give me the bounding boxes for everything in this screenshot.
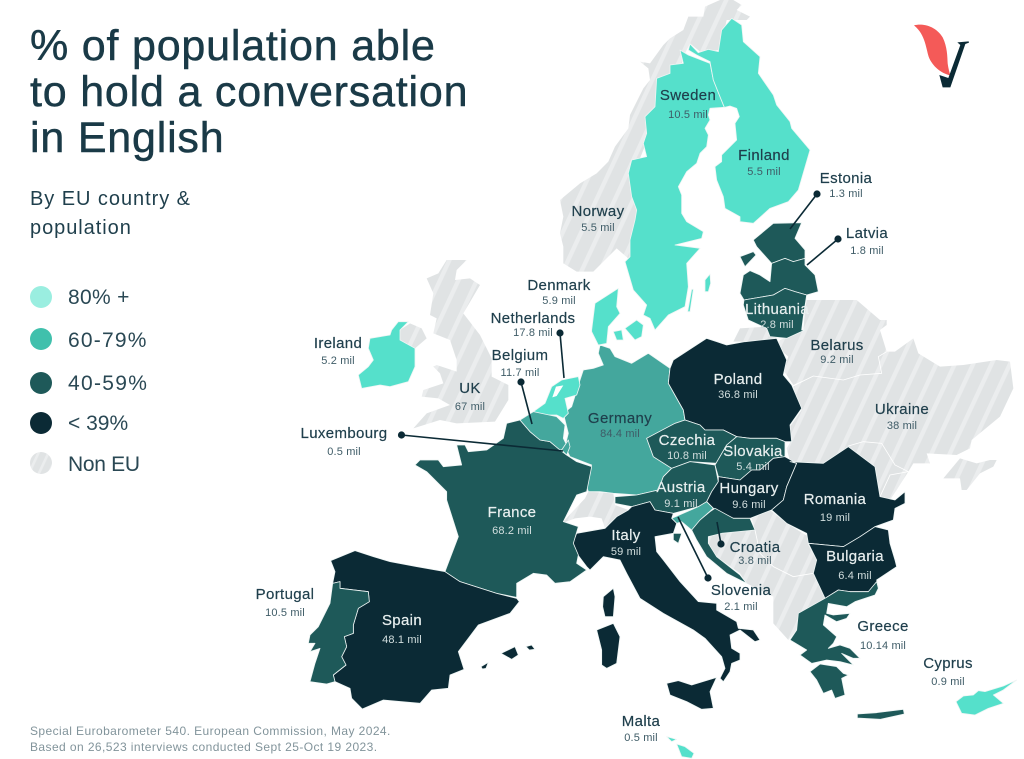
map of Europe bbox=[308, 0, 1017, 758]
country: Croatia bbox=[682, 508, 755, 583]
label: Hungary bbox=[719, 480, 779, 511]
legend item: 60-79%: 60-79% bbox=[68, 329, 148, 352]
label: Belgium: 11.7 mil bbox=[501, 367, 539, 379]
country: Austria bbox=[615, 462, 718, 513]
source note: Special Eurobarometer 540. European Commission, May 2024. bbox=[30, 724, 391, 738]
Greece: Peloponnese bbox=[810, 664, 848, 698]
country: Spain bbox=[331, 551, 519, 709]
label: Portugal: Portugal bbox=[256, 586, 314, 603]
label: Cyprus: 0.9 mil bbox=[931, 676, 965, 688]
label: Greece: 10.14 mil bbox=[860, 640, 906, 652]
country: Luxembourg bbox=[562, 440, 570, 455]
island: Sardinia bbox=[597, 623, 620, 668]
label: Sweden bbox=[660, 87, 716, 121]
country: Denmark (Jutland) bbox=[592, 288, 620, 345]
country: Cyprus bbox=[956, 680, 1017, 715]
label: Germany: 84.4 mil bbox=[600, 428, 640, 440]
label: Sweden: 10.5 mil bbox=[668, 109, 708, 121]
label: Latvia: Latvia bbox=[846, 225, 888, 242]
country: Belgium bbox=[520, 412, 568, 450]
label: Italy: 59 mil bbox=[611, 546, 641, 558]
country: France bbox=[415, 420, 592, 597]
label: Bulgaria: Bulgaria bbox=[826, 548, 884, 565]
Balkan borders bbox=[755, 530, 813, 577]
label: Spain bbox=[382, 612, 422, 646]
label: Ukraine bbox=[875, 401, 929, 432]
country: United Kingdom (Great Britain) bbox=[413, 260, 508, 428]
subtitle bbox=[30, 188, 191, 239]
label: Italy bbox=[611, 527, 641, 558]
label: Germany bbox=[588, 410, 652, 440]
legend item: under 39% bbox=[30, 412, 128, 435]
label: Hungary: Hungary bbox=[719, 480, 779, 497]
label: Lithuania: 2.8 mil bbox=[760, 319, 794, 331]
label: Portugal bbox=[256, 586, 314, 619]
label: Portugal: 10.5 mil bbox=[265, 607, 305, 619]
label: Sweden: Sweden bbox=[660, 87, 716, 104]
subtitle: population bbox=[30, 217, 132, 239]
title: to hold a conversation bbox=[30, 68, 468, 116]
label: Denmark bbox=[527, 277, 591, 307]
label: Malta bbox=[622, 713, 661, 744]
label: Ukraine: Ukraine bbox=[875, 401, 929, 418]
label: Ireland bbox=[314, 335, 362, 367]
island: Ibiza bbox=[481, 662, 488, 669]
label: Cyprus: Cyprus bbox=[923, 655, 973, 672]
island: Zealand bbox=[625, 320, 643, 340]
country: Norway bbox=[560, 0, 750, 272]
label: Belarus: Belarus bbox=[810, 337, 864, 354]
label: Italy: Italy bbox=[611, 527, 641, 544]
label: Czechia: 10.8 mil bbox=[667, 450, 707, 462]
country: Romania bbox=[772, 447, 905, 547]
country: Netherlands bbox=[533, 377, 580, 418]
island: Funen bbox=[613, 330, 623, 340]
label: Lithuania: Lithuania bbox=[745, 301, 809, 318]
logo: V letter bbox=[939, 41, 969, 87]
legend item: Non EU bbox=[30, 452, 140, 476]
country: Germany bbox=[563, 345, 685, 495]
label: Czechia bbox=[659, 432, 716, 462]
label: Poland bbox=[714, 371, 762, 401]
label: France bbox=[488, 504, 536, 537]
leader line: Slovenia bbox=[678, 517, 712, 582]
title: in English bbox=[30, 114, 224, 162]
country: Poland bbox=[668, 338, 802, 442]
country: Switzerland bbox=[562, 492, 628, 528]
legend item: 40-59% bbox=[30, 372, 148, 395]
label: Latvia bbox=[846, 225, 888, 257]
label: Romania bbox=[804, 491, 867, 524]
label: Croatia: 3.8 mil bbox=[738, 555, 772, 567]
label: Ireland: 5.2 mil bbox=[321, 355, 355, 367]
label: Luxembourg: Luxembourg bbox=[301, 425, 387, 442]
label: Poland: 36.8 mil bbox=[718, 389, 758, 401]
label: France: 68.2 mil bbox=[492, 525, 532, 537]
label: Romania: 19 mil bbox=[820, 512, 850, 524]
country: Hungary bbox=[707, 457, 797, 518]
island: Crete bbox=[857, 709, 904, 719]
label: Croatia: Croatia bbox=[730, 539, 781, 556]
country: Italy bbox=[572, 502, 760, 682]
label: Belgium: Belgium bbox=[492, 347, 548, 364]
legend item: Non EU: Non EU bbox=[68, 453, 140, 476]
border: Moldova bbox=[848, 442, 908, 497]
country: Bulgaria bbox=[808, 527, 897, 598]
label: Luxembourg bbox=[301, 425, 387, 458]
label: Poland: Poland bbox=[714, 371, 762, 388]
label: Austria: Austria bbox=[656, 479, 706, 496]
country: Lithuania bbox=[743, 288, 807, 338]
country: Slovakia bbox=[715, 437, 785, 480]
label: Estonia bbox=[820, 170, 873, 200]
label: Finland: 5.5 mil bbox=[747, 166, 781, 178]
label: Denmark: Denmark bbox=[527, 277, 591, 294]
country: Czechia bbox=[647, 420, 737, 468]
leader line: Estonia bbox=[790, 190, 821, 229]
title bbox=[30, 22, 468, 162]
country: Estonia bbox=[753, 223, 805, 263]
island: Corsica bbox=[603, 588, 615, 617]
label: Slovenia: Slovenia bbox=[711, 582, 771, 599]
label: Denmark: 5.9 mil bbox=[542, 295, 576, 307]
label: Latvia: 1.8 mil bbox=[850, 245, 884, 257]
label: Belarus bbox=[810, 337, 864, 366]
label: Norway: 5.5 mil bbox=[581, 222, 615, 234]
label: Malta: Malta bbox=[622, 713, 661, 730]
label: Czechia: Czechia bbox=[659, 432, 716, 449]
title: % of population able bbox=[30, 22, 436, 70]
label: Hungary: 9.6 mil bbox=[732, 499, 766, 511]
leader line: Latvia bbox=[807, 235, 842, 265]
label: Bulgaria: 6.4 mil bbox=[838, 570, 872, 582]
source note bbox=[30, 724, 391, 754]
label: Ireland: Ireland bbox=[314, 335, 362, 352]
label: Finland bbox=[738, 147, 790, 178]
region: Istria bbox=[673, 533, 682, 543]
island: Menorca bbox=[526, 645, 535, 650]
label: Slovakia: Slovakia bbox=[723, 443, 783, 460]
label: Norway: Norway bbox=[572, 203, 625, 220]
legend item: under 39%: < 39% bbox=[68, 412, 128, 435]
label: Malta: 0.5 mil bbox=[624, 732, 658, 744]
label: Lithuania bbox=[745, 301, 809, 331]
border: Belarus and Ukraine bbox=[793, 352, 887, 386]
island: Gotland bbox=[705, 274, 711, 292]
label: Austria bbox=[656, 479, 706, 510]
label: Greece bbox=[857, 618, 909, 652]
Balkan non-EU countries bbox=[708, 510, 825, 640]
country: Latvia bbox=[740, 258, 818, 300]
leader line: Belgium bbox=[517, 378, 532, 424]
label: Germany: Germany bbox=[588, 410, 652, 427]
leader line: Croatia bbox=[717, 522, 725, 548]
label: UK bbox=[455, 380, 485, 413]
legend item: 80% +: 80% + bbox=[68, 286, 130, 309]
label: Ukraine: 38 mil bbox=[887, 420, 917, 432]
country: Slovenia bbox=[672, 502, 713, 530]
label: Greece: Greece bbox=[857, 618, 909, 635]
logo: flame bbox=[914, 25, 950, 75]
country: Belarus bbox=[777, 300, 887, 385]
label: UK: 67 mil bbox=[455, 401, 485, 413]
label: Slovenia: 2.1 mil bbox=[724, 601, 758, 613]
country: Northern Ireland bbox=[400, 323, 427, 348]
label: Estonia: Estonia bbox=[820, 170, 873, 187]
region: Crimea bbox=[943, 458, 997, 490]
island: Malta bbox=[677, 744, 694, 758]
label: Netherlands bbox=[491, 310, 575, 339]
country: Sweden bbox=[625, 50, 724, 330]
legend item: 60-79% bbox=[30, 328, 148, 352]
label: Spain: Spain bbox=[382, 612, 422, 629]
source note: Based on 26,523 interviews conducted Sept 25-Oct 19 2023. bbox=[30, 740, 378, 754]
label: Slovenia bbox=[711, 582, 771, 613]
label: Finland: Finland bbox=[738, 147, 790, 164]
label: Romania: Romania bbox=[804, 491, 867, 508]
label: Croatia bbox=[730, 539, 781, 567]
island: Sicily bbox=[667, 677, 717, 709]
label: UK: UK bbox=[459, 380, 481, 397]
legend item: 80% + bbox=[30, 286, 130, 309]
island: Oland bbox=[688, 289, 693, 312]
country: Greece mainland bbox=[790, 582, 878, 665]
island: Saaremaa bbox=[740, 252, 756, 267]
label: Netherlands: Netherlands bbox=[491, 310, 575, 327]
Netherlands inner sea bbox=[552, 385, 563, 397]
island: Gozo bbox=[667, 737, 677, 742]
label: France: France bbox=[488, 504, 536, 521]
label: Estonia: 1.3 mil bbox=[829, 188, 863, 200]
legend bbox=[30, 286, 148, 476]
label: Slovakia bbox=[723, 443, 783, 473]
leader line: Luxembourg bbox=[398, 431, 563, 451]
country: Ireland bbox=[358, 322, 415, 388]
legend item: 40-59%: 40-59% bbox=[68, 372, 148, 395]
label: Belgium bbox=[492, 347, 548, 379]
label: Slovakia: 5.4 mil bbox=[736, 461, 770, 473]
logo bbox=[914, 25, 969, 87]
label: Belarus: 9.2 mil bbox=[820, 354, 854, 366]
label: Cyprus bbox=[923, 655, 973, 688]
region: Kaliningrad bbox=[733, 327, 777, 342]
island: Mallorca bbox=[501, 647, 518, 659]
country: Finland bbox=[688, 18, 810, 223]
label: Norway bbox=[572, 203, 625, 234]
label: Luxembourg: 0.5 mil bbox=[327, 446, 361, 458]
subtitle: By EU country & bbox=[30, 188, 191, 210]
country: Portugal bbox=[308, 582, 369, 684]
leader line: Netherlands bbox=[556, 329, 564, 378]
label: Austria: 9.1 mil bbox=[664, 498, 698, 510]
country: Ukraine bbox=[787, 338, 1013, 500]
label: Netherlands: 17.8 mil bbox=[513, 327, 553, 339]
label: Spain: 48.1 mil bbox=[382, 634, 422, 646]
label: Bulgaria bbox=[826, 548, 884, 582]
